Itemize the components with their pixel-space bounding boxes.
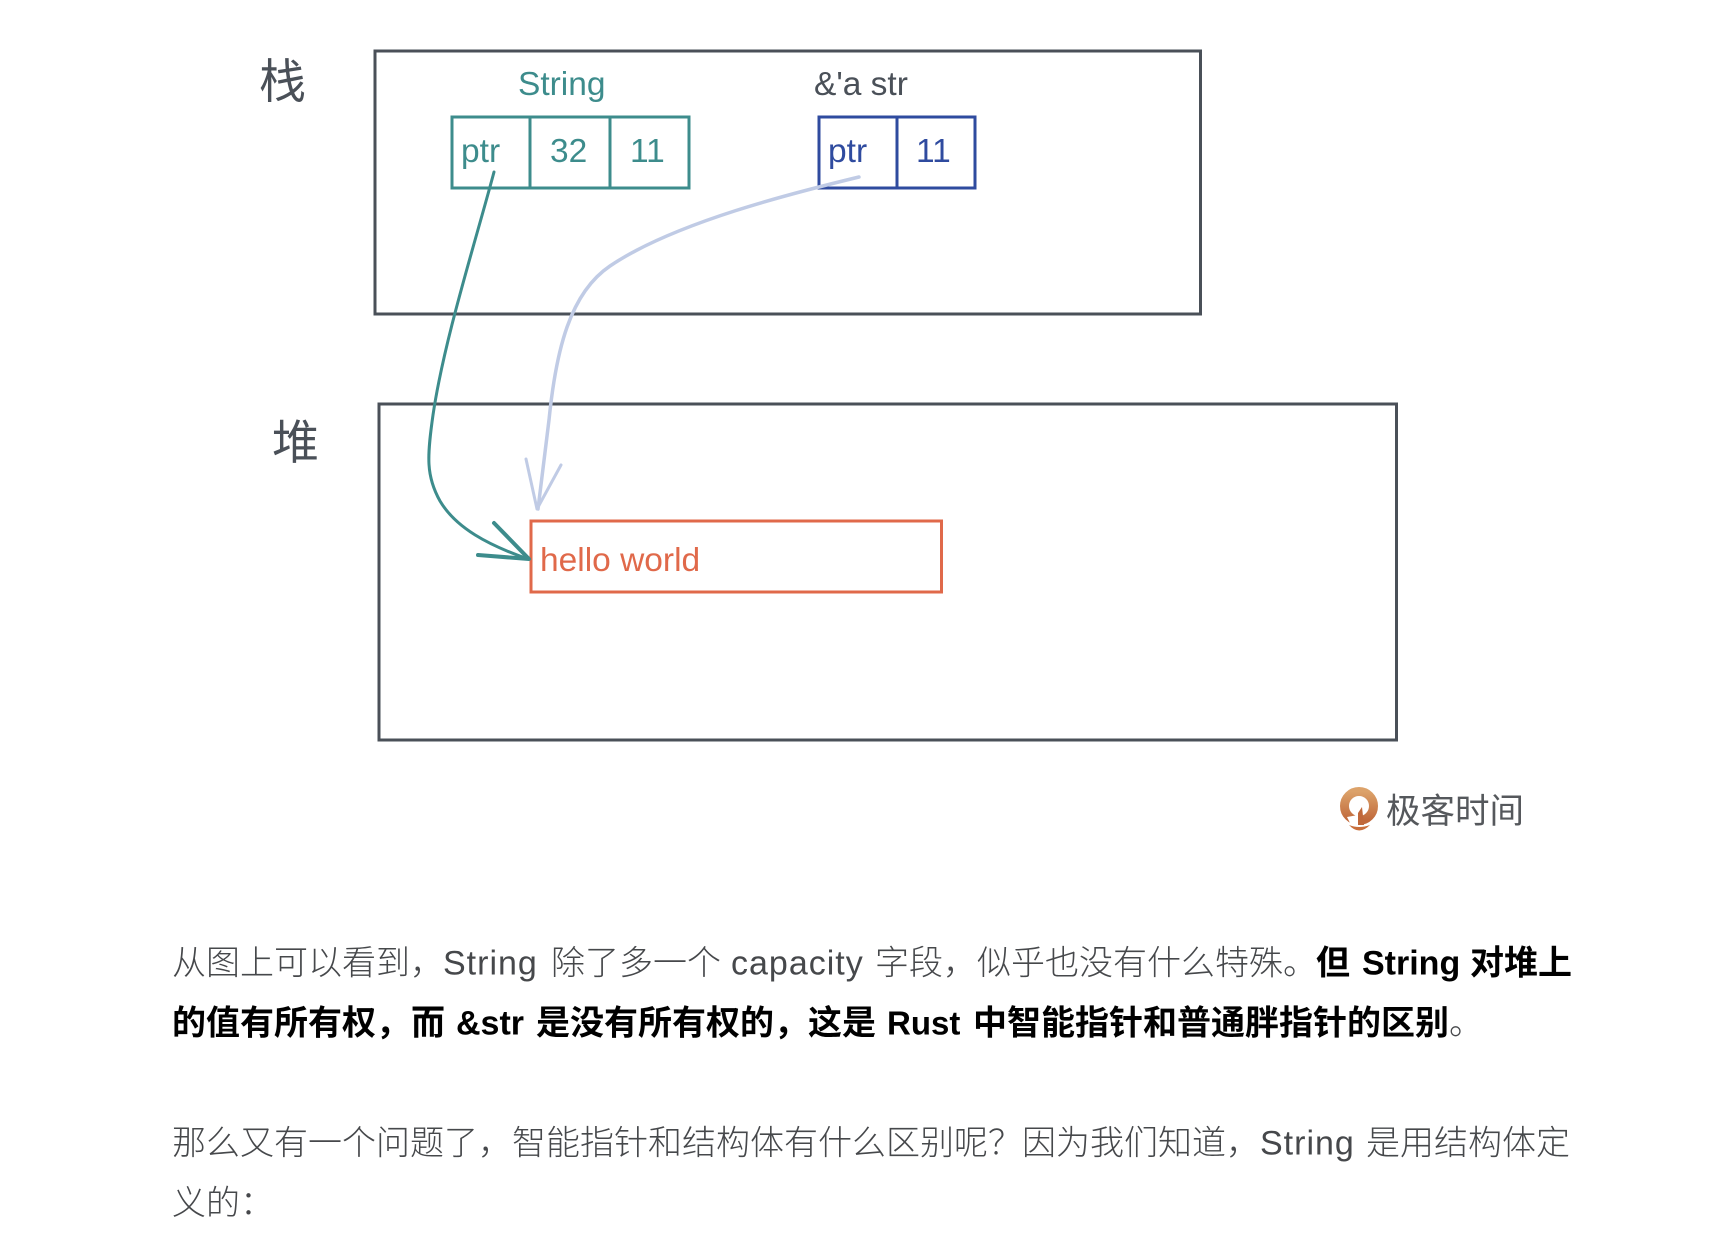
heading: heap: 堆 bbox=[272, 416, 319, 469]
heading: stack: 栈 bbox=[259, 55, 306, 108]
text block: paragraph one: 字段，似乎也没有什么特殊。 bbox=[875, 944, 1317, 982]
str cell values: 11 bbox=[916, 133, 951, 170]
text block: paragraph two: 义的： bbox=[172, 1184, 274, 1222]
text block: paragraph one: String bbox=[1362, 944, 1460, 982]
str cell values bbox=[828, 133, 951, 170]
text block: paragraph one, emphasis: 是没有所有权的， bbox=[536, 1004, 808, 1042]
text block: paragraph one: 对堆上 bbox=[1470, 944, 1572, 982]
text block: paragraph one: 除了多一个 bbox=[551, 944, 721, 982]
String cell values: 11 bbox=[630, 133, 665, 170]
str cells bbox=[819, 117, 975, 188]
text block: paragraph one: 从图上可以看到， bbox=[172, 944, 444, 982]
logo icon bbox=[1344, 792, 1374, 830]
str cell values: ptr bbox=[828, 133, 867, 170]
text block: paragraph two: String bbox=[1260, 1124, 1355, 1162]
logo: geektime bbox=[1344, 792, 1524, 831]
String struct bbox=[452, 66, 689, 188]
label: String: String bbox=[518, 66, 606, 103]
text block: paragraph one, emphasis: 这是 bbox=[808, 1004, 876, 1042]
arrow: str ptr to heap bbox=[526, 177, 859, 509]
arrow: String ptr to heap bbox=[429, 172, 529, 559]
text block: paragraph one, emphasis: 。 bbox=[1449, 1004, 1483, 1042]
String cell values bbox=[461, 133, 665, 170]
heap frame bbox=[379, 404, 1396, 740]
String cell values: 32 bbox=[550, 133, 587, 170]
logo text: 极客时间 bbox=[1386, 793, 1524, 831]
text block: paragraph two: 那么又有一个问题了，智能指针和结构体有什么区别呢？因为我们知道， bbox=[172, 1124, 1260, 1162]
stack frame bbox=[375, 51, 1200, 314]
hello world buffer bbox=[531, 521, 942, 592]
text block: paragraph one: capacity bbox=[731, 944, 864, 982]
text block: paragraph one, emphasis: 而 bbox=[411, 1004, 445, 1042]
text block: paragraph one, emphasis: 中智能指针和普通胖指针的区别 bbox=[973, 1004, 1449, 1042]
&'a str struct bbox=[814, 66, 975, 188]
text block: paragraph one, emphasis: &str bbox=[456, 1004, 524, 1042]
text block: paragraph one: String bbox=[443, 944, 538, 982]
text block: paragraph one, emphasis: 的值有所有权， bbox=[172, 1004, 410, 1042]
text block: paragraph two: 是用结构体定 bbox=[1366, 1124, 1570, 1162]
text block: paragraph one, emphasis: Rust bbox=[887, 1004, 960, 1042]
String cell values: ptr bbox=[461, 133, 500, 170]
label: &'a str: &'a str bbox=[814, 66, 908, 103]
buffer box bbox=[531, 521, 942, 592]
text block: paragraph one: 但 bbox=[1316, 944, 1350, 982]
panel: heap bbox=[379, 404, 1396, 740]
String cells bbox=[452, 117, 689, 188]
panel: stack bbox=[375, 51, 1200, 314]
buffer text: hello world bbox=[540, 542, 700, 579]
